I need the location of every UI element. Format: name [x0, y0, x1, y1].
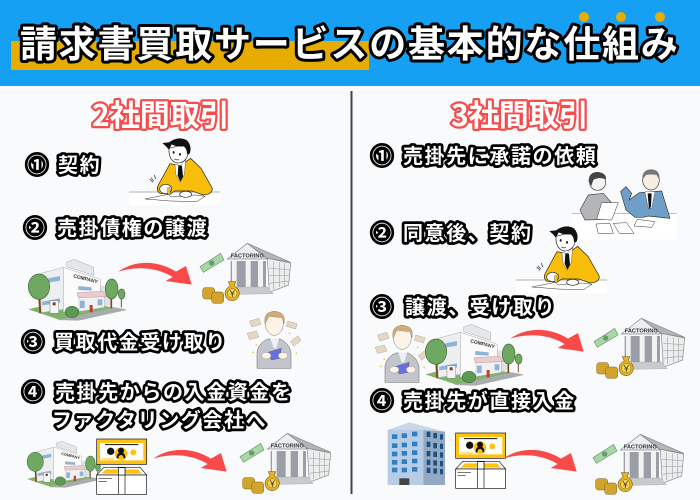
panel: two-party transaction	[23, 91, 331, 494]
step 4 text: ④	[23, 376, 45, 405]
step 3 text: 譲渡、受け取り	[405, 291, 556, 320]
icon: company building	[28, 259, 127, 321]
icon: company building: COMPANY	[470, 338, 496, 351]
step 2 text: ②	[25, 212, 47, 241]
step 1 text: 契約	[58, 149, 101, 178]
icon: company building	[425, 324, 524, 386]
icon: two businessmen meeting	[572, 169, 677, 239]
icon: company building: COMPANY	[73, 273, 99, 286]
icon: man signing contract	[129, 138, 220, 205]
step 3 text: 買取代金受け取り	[54, 326, 227, 355]
arrow	[118, 263, 192, 285]
icon: man signing contract	[516, 226, 607, 293]
header banner	[0, 0, 700, 86]
step 4 text: ④	[372, 385, 394, 414]
icon: factoring bank with money	[240, 433, 331, 493]
step 1 text: ①	[372, 140, 394, 169]
icon: office building	[388, 422, 445, 485]
step 4 text: 売掛先が直接入金	[403, 385, 576, 414]
icon: happy person with money	[247, 311, 301, 368]
step 3 text: ③	[372, 291, 394, 320]
icon: factoring bank with money	[594, 318, 685, 378]
step 1 text: ①	[27, 149, 49, 178]
step 4 text line 2: ファクタリング会社へ	[52, 404, 267, 433]
icon: factoring bank with money: FACTORING	[625, 329, 659, 335]
icon: factoring bank with money	[200, 243, 291, 303]
arrow	[503, 450, 577, 472]
arrow	[510, 330, 584, 352]
icon: small company: COMPANY	[61, 452, 81, 460]
panel: three-party transaction	[372, 91, 685, 494]
icon: factoring bank with money: FACTORING	[271, 444, 305, 450]
icon: cash and box	[97, 439, 147, 494]
step 2 text: 同意後、契約	[403, 217, 533, 246]
icon: happy person with money	[375, 325, 429, 382]
step 2 text: ②	[372, 217, 394, 246]
heading: 2社間取引: 2社間取引	[92, 91, 230, 135]
arrow	[153, 450, 227, 472]
title: 請求書買取サービスの基本的な仕組み	[20, 14, 680, 68]
step 1 text: 売掛先に承諾の依頼	[403, 140, 597, 169]
icon: factoring bank with money	[593, 434, 684, 494]
step 2 text: 売掛債権の譲渡	[57, 212, 208, 241]
step 3 text: ③	[23, 326, 45, 355]
gold highlight bar	[11, 41, 369, 70]
icon: small company	[27, 441, 102, 488]
icon: cash and box	[456, 433, 506, 488]
center divider	[350, 91, 352, 494]
heading: 3社間取引: 3社間取引	[451, 91, 589, 135]
icon: factoring bank with money: FACTORING	[624, 445, 658, 451]
icon: factoring bank with money: FACTORING	[231, 254, 265, 260]
step 4 text: 売掛先からの入金資金を	[55, 376, 293, 405]
decorative dots	[579, 12, 665, 22]
